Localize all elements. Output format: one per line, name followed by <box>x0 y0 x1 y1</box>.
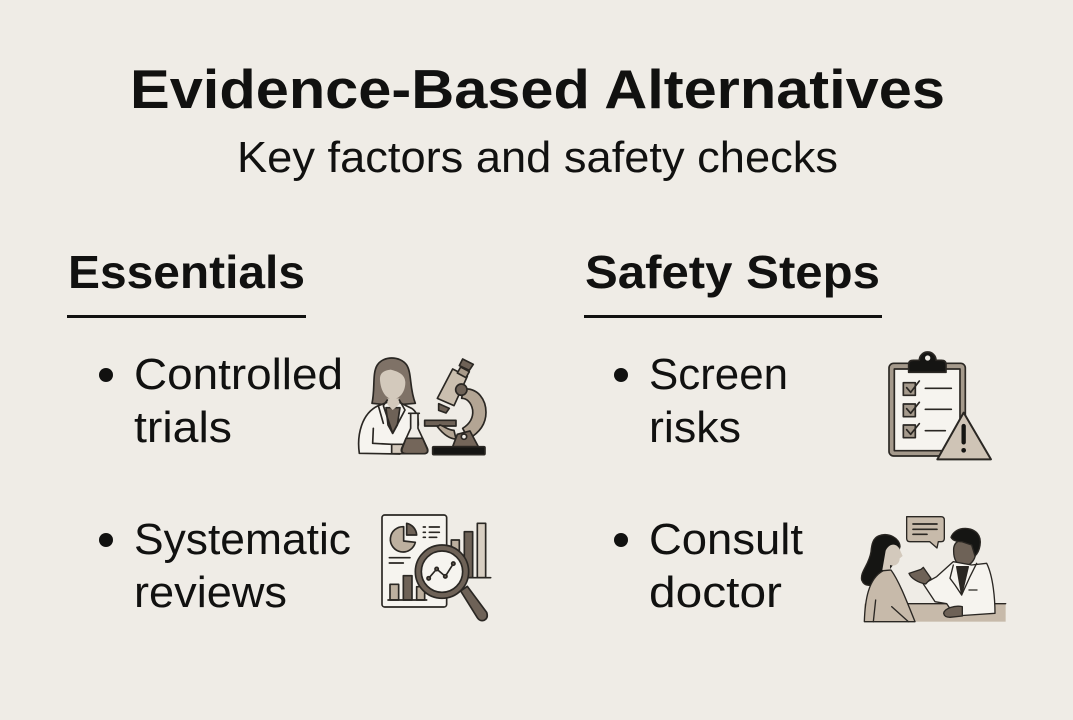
panel: safety steps <box>584 246 1006 622</box>
icon: report with magnifying glass <box>382 515 491 621</box>
bullet: consult doctor: doctor <box>649 568 782 617</box>
bullet: systematic reviews: reviews <box>134 568 287 617</box>
panel: essentials <box>67 246 491 621</box>
subtitle: Key factors and safety checks <box>237 133 838 182</box>
icon: patient consulting doctor <box>861 517 1006 622</box>
bullet: controlled trials <box>99 350 343 452</box>
bullet: consult doctor <box>614 515 803 617</box>
icon: scientist and microscope <box>359 358 486 455</box>
bullet: controlled trials: trials <box>134 403 232 452</box>
heading: safety steps <box>584 246 882 318</box>
heading: essentials: Essentials <box>68 246 305 298</box>
bullet: systematic reviews: Systematic <box>134 515 351 564</box>
heading: safety steps: Safety Steps <box>585 246 880 298</box>
bullet: systematic reviews <box>99 515 351 617</box>
heading: essentials <box>67 246 306 318</box>
bullet: screen risks <box>614 350 788 452</box>
bullet: consult doctor: Consult <box>649 515 803 564</box>
bullet: screen risks: risks <box>649 403 741 452</box>
bullet: controlled trials: Controlled <box>134 350 343 399</box>
bullet: screen risks: Screen <box>649 350 788 399</box>
title: Evidence-Based Alternatives <box>130 58 945 120</box>
icon: checklist with warning <box>889 352 991 459</box>
